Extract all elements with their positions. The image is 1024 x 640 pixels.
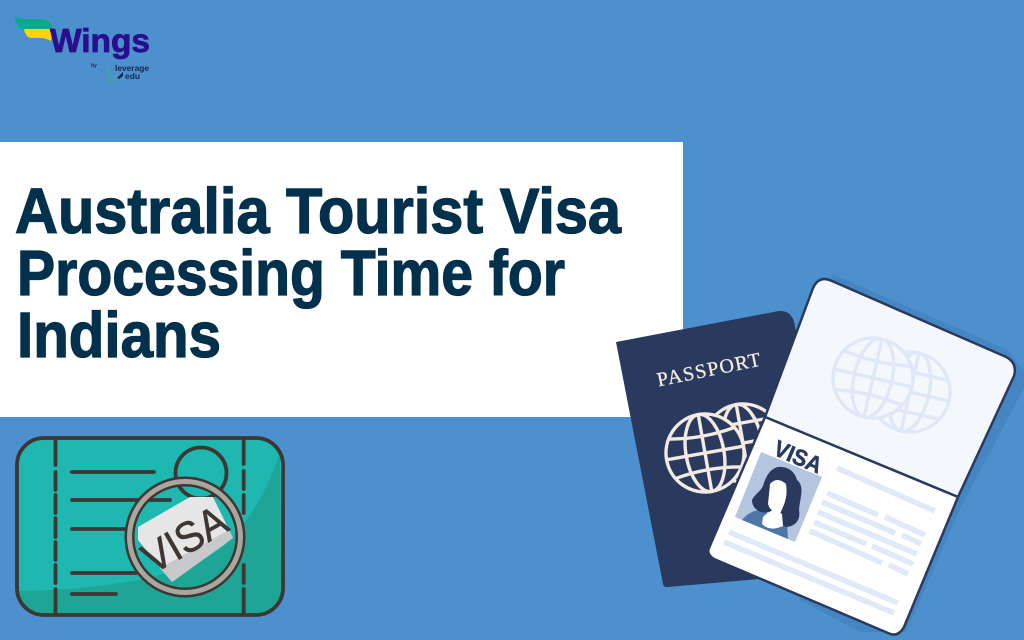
title panel <box>0 142 683 417</box>
visa page heading: VISA <box>770 435 826 478</box>
logo: Wings by leverage edu: leverage <box>115 63 149 73</box>
logo: Wings by leverage edu: by <box>91 63 97 69</box>
photo <box>735 452 822 542</box>
icon: visa ticket with stamp <box>17 438 283 615</box>
passport globes <box>660 398 788 498</box>
text lines <box>724 468 935 613</box>
passport label: PASSPORT <box>655 349 762 391</box>
title: Processing Time for <box>17 237 565 309</box>
title <box>15 175 621 371</box>
logo: Wings by leverage edu: Wings <box>50 22 150 59</box>
visa page lower <box>708 417 958 635</box>
icon: passport and visa page <box>616 274 1024 635</box>
icon: visa ticket with stamp: VISA <box>134 496 236 583</box>
title: Indians <box>17 299 221 371</box>
visa page globes <box>825 330 958 440</box>
logo: Wings by leverage edu: edu <box>125 71 140 81</box>
logo: Wings by leverage edu <box>15 14 150 82</box>
title: Australia Tourist Visa <box>15 175 621 247</box>
visa page upper <box>765 279 1015 497</box>
passport cover <box>616 311 860 587</box>
